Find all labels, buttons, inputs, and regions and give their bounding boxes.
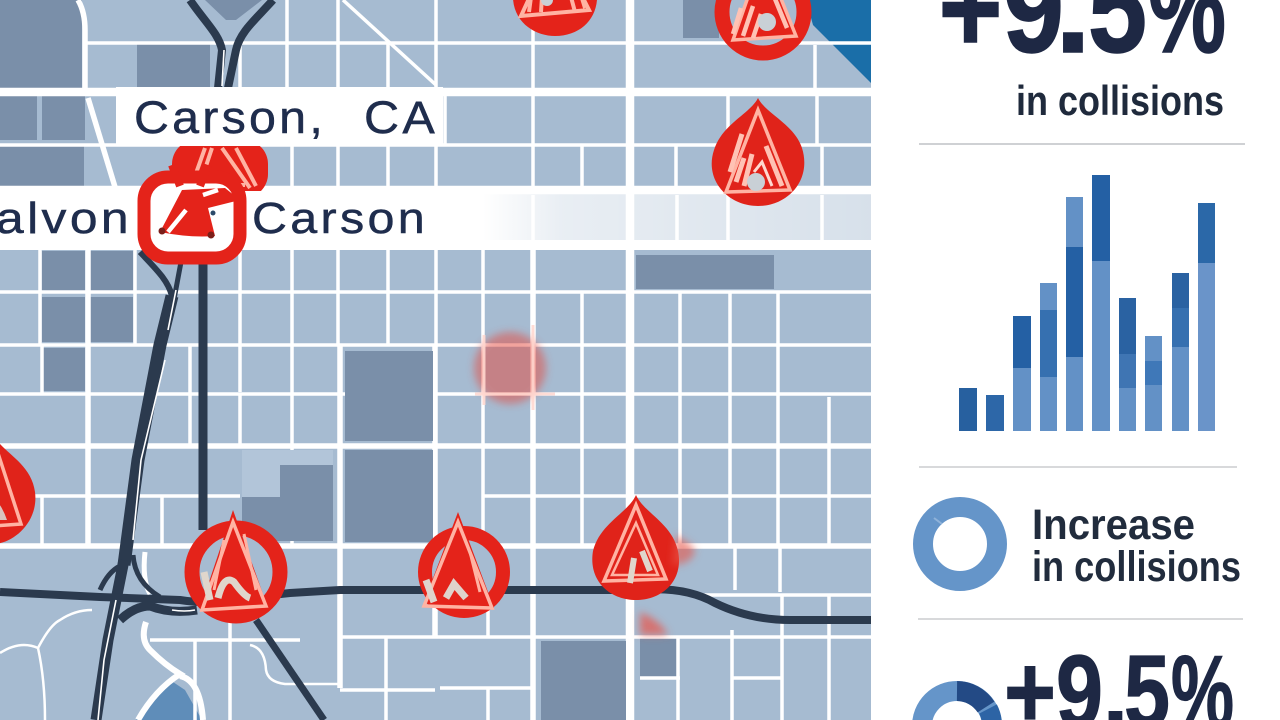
heading: top figure <box>938 0 1226 80</box>
marker: centre road hazard <box>424 512 503 613</box>
white street grid <box>0 0 871 720</box>
marker: faded hazard <box>474 325 555 410</box>
marker: right road hazard <box>592 495 679 600</box>
panel: street map <box>0 0 871 720</box>
highways <box>0 0 871 720</box>
label: alvon Carson street band <box>0 191 440 250</box>
darker blocks under the grid <box>0 0 774 678</box>
divider <box>919 466 1237 468</box>
panel: statistics <box>912 0 1245 720</box>
text: increase in collisions <box>1032 501 1241 591</box>
marker: top right hazard <box>722 0 804 53</box>
map base blocks <box>0 0 871 720</box>
water: bottom lake <box>136 680 202 720</box>
marker: behind label hazard <box>172 140 268 198</box>
label: Carson, CA <box>116 87 443 146</box>
label: Carson, CA: Carson, <box>134 92 326 143</box>
divider <box>919 143 1245 145</box>
marker: left edge hazard <box>0 434 35 544</box>
water: top right bay <box>806 0 871 83</box>
marker: right hazard <box>712 98 804 206</box>
label: Carson, CA: CA <box>364 92 438 143</box>
text: increase in collisions: in collisions <box>1032 543 1241 591</box>
solid dark blocks over the grid <box>242 351 626 720</box>
highway median lines <box>98 50 224 720</box>
label: alvon Carson street band: Carson <box>252 194 428 243</box>
chart: stacked bar chart <box>959 175 1215 431</box>
heading: bottom figure <box>1004 634 1234 720</box>
divider <box>918 618 1243 620</box>
text: increase in collisions: Increase <box>1032 501 1195 549</box>
chart: partial donut <box>922 691 992 720</box>
river and irregular bottom-left streets <box>0 552 203 720</box>
faded red glow marks <box>640 535 695 635</box>
strip: faded street-name band <box>430 193 871 242</box>
marker: top centre hazard <box>513 0 597 36</box>
chart: full donut <box>923 507 997 581</box>
text: in collisions caption: in collisions <box>1016 77 1224 124</box>
marker: central label hazard <box>144 165 240 258</box>
marker: interchange hazard <box>192 510 280 616</box>
